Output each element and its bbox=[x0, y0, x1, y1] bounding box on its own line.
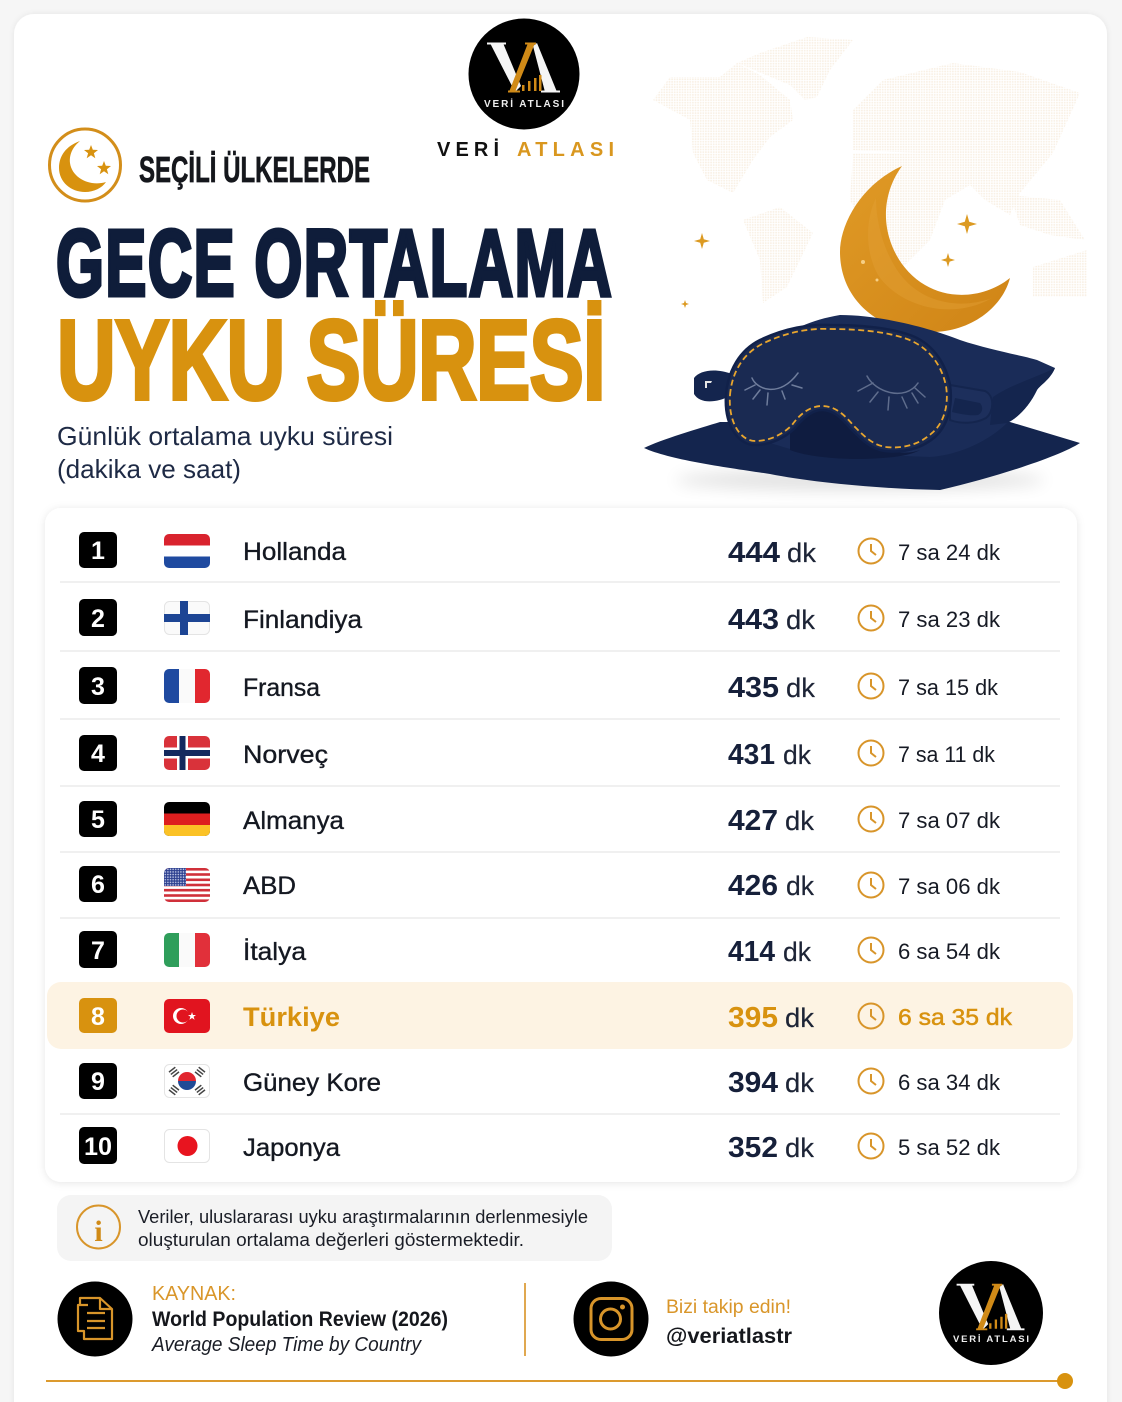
row 2: Finlandiya: Finlandiya bbox=[243, 606, 362, 634]
row 8: Türkiye highlighted: 395 bbox=[728, 1002, 778, 1034]
row 4: Norveç: dk bbox=[783, 740, 811, 770]
left strap bbox=[694, 371, 732, 401]
lower cushion bbox=[644, 422, 1080, 490]
row 2: Finlandiya bbox=[79, 599, 1001, 636]
source text: Average Sleep Time by Country bbox=[151, 1334, 422, 1356]
row 2: Finlandiya: 443 bbox=[728, 604, 779, 636]
row 7: İtalya bbox=[79, 931, 1001, 968]
row 3: Fransa: 3 bbox=[91, 673, 105, 701]
brand name: Veri Atlası bbox=[437, 138, 614, 161]
callout: data note: i bbox=[94, 1215, 103, 1248]
brand name: Veri Atlası: ATLASI bbox=[517, 139, 614, 161]
row 10: Japonya bbox=[79, 1127, 1001, 1164]
row 4: Norveç: 7 sa 11 dk bbox=[898, 742, 996, 767]
mask stitching bbox=[730, 329, 947, 447]
row 3: Fransa: Fransa bbox=[243, 674, 320, 702]
social handle bbox=[666, 1297, 792, 1348]
row 6: ABD: 6 bbox=[91, 871, 105, 899]
row 4: Norveç: Norveç bbox=[243, 741, 328, 769]
social handle: Bizi takip edin! bbox=[666, 1297, 791, 1318]
row 1: Hollanda: Hollanda bbox=[243, 538, 346, 566]
row 3: Fransa: 435 bbox=[728, 672, 779, 704]
source text: World Population Review (2026) bbox=[152, 1308, 448, 1331]
icon: sparkle stars bbox=[681, 214, 977, 308]
row 6: ABD: ABD bbox=[243, 872, 296, 900]
upper pillow bbox=[760, 315, 1055, 457]
subtitle bbox=[57, 421, 393, 484]
callout: data note: Veriler, uluslararası uyku araştırmalarının derlenmesiyle bbox=[138, 1207, 588, 1227]
row 10: Japonya: 352 bbox=[728, 1132, 778, 1164]
row 7: İtalya: 414 bbox=[728, 936, 775, 968]
title: Gece Ortalama: GECE ORTALAMA bbox=[56, 209, 612, 316]
heading: Seçili Ülkelerde: SEÇİLİ ÜLKELERDE bbox=[139, 149, 370, 190]
row 3: Fransa: dk bbox=[786, 673, 815, 703]
row 6: ABD: 7 sa 06 dk bbox=[898, 874, 1001, 899]
illustration: pillow and sleep mask bbox=[644, 315, 1080, 490]
row 2: Finlandiya: 7 sa 23 dk bbox=[898, 607, 1001, 632]
source text bbox=[151, 1283, 448, 1356]
row 10: Japonya: 10 bbox=[84, 1133, 112, 1161]
row 1: Hollanda: 1 bbox=[91, 537, 105, 565]
brand name: Veri Atlası: VERİ bbox=[437, 138, 499, 161]
row 8: Türkiye highlighted: 6 sa 35 dk bbox=[898, 1004, 1013, 1030]
row 9: Güney Kore bbox=[79, 1063, 1001, 1099]
callout: data note bbox=[57, 1195, 612, 1261]
row 10: Japonya: Japonya bbox=[243, 1134, 340, 1162]
row 7: İtalya: 7 bbox=[91, 937, 105, 965]
row 8: Türkiye highlighted: 8 bbox=[91, 1003, 105, 1031]
row 6: ABD: dk bbox=[786, 871, 814, 901]
row 2: Finlandiya: dk bbox=[786, 605, 815, 635]
closed eyes bbox=[745, 373, 802, 405]
right strap bbox=[950, 385, 992, 423]
row 5: Almanya: dk bbox=[785, 806, 814, 836]
footer line with dot bbox=[46, 1373, 1073, 1389]
row 5: Almanya: 5 bbox=[91, 806, 105, 834]
logo: Veri Atlası bottom: VERİ ATLASI bbox=[953, 1334, 1029, 1345]
social handle: @veriatlastr bbox=[666, 1325, 792, 1348]
row 10: Japonya: dk bbox=[785, 1133, 814, 1163]
row 5: Almanya: 427 bbox=[728, 805, 778, 837]
row 7: İtalya: İtalya bbox=[243, 937, 306, 966]
row 6: ABD: 426 bbox=[728, 870, 778, 902]
row 5: Almanya: Almanya bbox=[243, 807, 344, 835]
logo: Veri Atlası top bbox=[468, 18, 580, 130]
row 1: Hollanda bbox=[79, 532, 1001, 569]
row 2: Finlandiya: 2 bbox=[91, 605, 105, 633]
icon: instagram bbox=[574, 1282, 648, 1356]
world map background bbox=[653, 37, 1087, 303]
row 1: Hollanda: 7 sa 24 dk bbox=[898, 540, 1001, 565]
row 5: Almanya: 7 sa 07 dk bbox=[898, 808, 1001, 833]
source text: KAYNAK: bbox=[152, 1283, 236, 1305]
row 4: Norveç: 4 bbox=[91, 740, 105, 768]
subtitle: Günlük ortalama uyku süresi bbox=[57, 421, 393, 451]
row 8: Türkiye highlighted: dk bbox=[785, 1003, 814, 1033]
row 7: İtalya: dk bbox=[783, 937, 811, 967]
row 9: Güney Kore: 6 sa 34 dk bbox=[898, 1070, 1001, 1095]
row 9: Güney Kore: 394 bbox=[728, 1067, 778, 1099]
row 1: Hollanda: dk bbox=[787, 538, 816, 568]
row 4: Norveç bbox=[79, 735, 996, 771]
row 10: Japonya: 5 sa 52 dk bbox=[898, 1135, 1001, 1160]
panel: ranking table bbox=[45, 508, 1077, 1182]
row 6: ABD bbox=[79, 866, 1001, 902]
icon: crescent moon badge bbox=[50, 129, 120, 201]
row 9: Güney Kore: 9 bbox=[91, 1068, 105, 1096]
row 9: Güney Kore: Güney Kore bbox=[243, 1069, 381, 1097]
row 7: İtalya: 6 sa 54 dk bbox=[898, 939, 1001, 964]
row 3: Fransa: 7 sa 15 dk bbox=[898, 675, 999, 700]
row 1: Hollanda: 444 bbox=[728, 537, 780, 569]
mask body bbox=[726, 325, 951, 451]
callout: data note: oluşturulan ortalama değerleri göstermektedir. bbox=[138, 1230, 524, 1250]
title: Uyku Süresi: UYKU SÜRESİ bbox=[57, 297, 606, 423]
icon: crescent moon illustration bbox=[840, 166, 1010, 332]
row 4: Norveç: 431 bbox=[728, 739, 775, 771]
row 9: Güney Kore: dk bbox=[785, 1068, 814, 1098]
row 8: Türkiye highlighted: Türkiye bbox=[243, 1002, 340, 1032]
logo: Veri Atlası top: VERİ ATLASI bbox=[484, 97, 564, 110]
icon: source document bbox=[58, 1282, 132, 1356]
row 5: Almanya bbox=[79, 801, 1001, 837]
row 8: Türkiye highlighted bbox=[47, 982, 1073, 1049]
subtitle: (dakika ve saat) bbox=[57, 454, 241, 484]
shadow under nose bridge bbox=[790, 408, 920, 459]
row 3: Fransa bbox=[79, 667, 999, 704]
logo: Veri Atlası bottom bbox=[939, 1261, 1043, 1365]
